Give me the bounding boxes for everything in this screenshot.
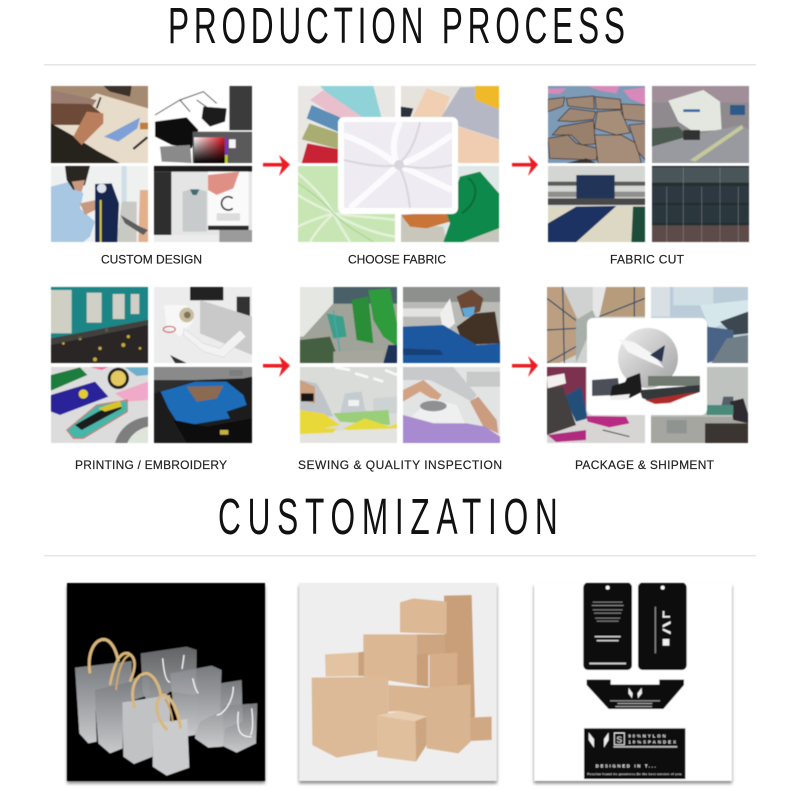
card: white fabric swirl bbox=[338, 117, 458, 214]
photo: label printing machine bbox=[154, 286, 252, 364]
arrow 4 bbox=[512, 356, 538, 377]
photo: embroidery machines bbox=[50, 286, 149, 364]
size label: 90%NYLON bbox=[628, 734, 666, 739]
panel: choose fabric bbox=[298, 86, 499, 242]
arrows row 1 and 2 bbox=[263, 155, 538, 377]
card: globe with truck and ship bbox=[587, 318, 707, 415]
back row bags bbox=[141, 647, 257, 753]
photo: 3D garment software bbox=[153, 165, 253, 242]
arrow 1 bbox=[263, 155, 290, 176]
arrow 2 bbox=[512, 155, 538, 176]
photo: cut fabric pieces bbox=[547, 85, 646, 164]
label: fabric cut: FABRIC CUT bbox=[610, 252, 685, 266]
label: sewing quality inspection: SEWING & QUALITY INSPECTION bbox=[298, 458, 502, 472]
photo: rubber patches bbox=[50, 366, 149, 444]
shadows under customization panels bbox=[67, 586, 732, 784]
photo: striped fabric stack bbox=[651, 165, 750, 243]
panel: printing and embroidery bbox=[51, 287, 252, 443]
size label: DESIGNED IN T... bbox=[596, 764, 656, 769]
panel: hang tags and labels bbox=[534, 582, 732, 782]
label: printing embroidery: PRINTING / EMBROIDERY bbox=[75, 458, 227, 472]
production process photo grid bbox=[51, 86, 749, 443]
photo: illustration and colour picker bbox=[154, 85, 253, 164]
tag back bbox=[638, 583, 687, 670]
photo: fabric spreading table bbox=[547, 166, 646, 243]
photo: ironing purple fabric bbox=[402, 366, 501, 444]
photo: sewing workshop with green garments bbox=[299, 286, 398, 364]
tag front bbox=[583, 583, 632, 670]
photo: worker with blue fabric bbox=[402, 286, 501, 364]
panel: custom design bbox=[51, 86, 252, 242]
photo: tailor measuring dress form bbox=[50, 165, 149, 243]
photo: packing workshop bbox=[650, 366, 749, 444]
panel: cardboard boxes bbox=[298, 583, 498, 782]
photo: worker cutting magenta fabric bbox=[546, 366, 646, 444]
size label: Peculiar found its greatness.Be the best version of you. bbox=[587, 772, 682, 776]
title: customization: CUSTOMIZATION bbox=[218, 488, 558, 545]
photo: neutral fabric rolls bbox=[400, 85, 500, 164]
label: choose fabric: CHOOSE FABRIC bbox=[348, 252, 446, 266]
panel: frosted bags bbox=[66, 582, 266, 782]
size label bbox=[584, 728, 685, 779]
size label: 10%SPANDEX bbox=[628, 739, 676, 744]
panel: package and shipment bbox=[547, 287, 748, 443]
photo: cutting machine bbox=[651, 85, 750, 164]
label: custom design: CUSTOM DESIGN bbox=[101, 252, 202, 266]
photo: workers in masks on line bbox=[299, 366, 398, 444]
photo: green and orange fabric bbox=[400, 166, 500, 243]
front row bags bbox=[75, 639, 189, 776]
label: package shipment: PACKAGE & SHIPMENT bbox=[575, 458, 715, 472]
size label: S bbox=[616, 734, 622, 744]
photo: warehouse shelves bbox=[546, 286, 646, 364]
customization photos bbox=[67, 583, 732, 781]
arrow 3 bbox=[263, 356, 290, 377]
photo: room with garments bbox=[650, 286, 749, 364]
photo: hand sketching on desk bbox=[50, 85, 149, 164]
photo: light green fabric bbox=[298, 166, 396, 242]
panel: sewing and quality inspection bbox=[300, 287, 500, 443]
photo: folded coloured fabrics bbox=[298, 85, 396, 164]
photo: heat press with blue shirt bbox=[153, 366, 253, 444]
folded label bbox=[587, 680, 684, 709]
panel: fabric cut bbox=[548, 86, 749, 242]
